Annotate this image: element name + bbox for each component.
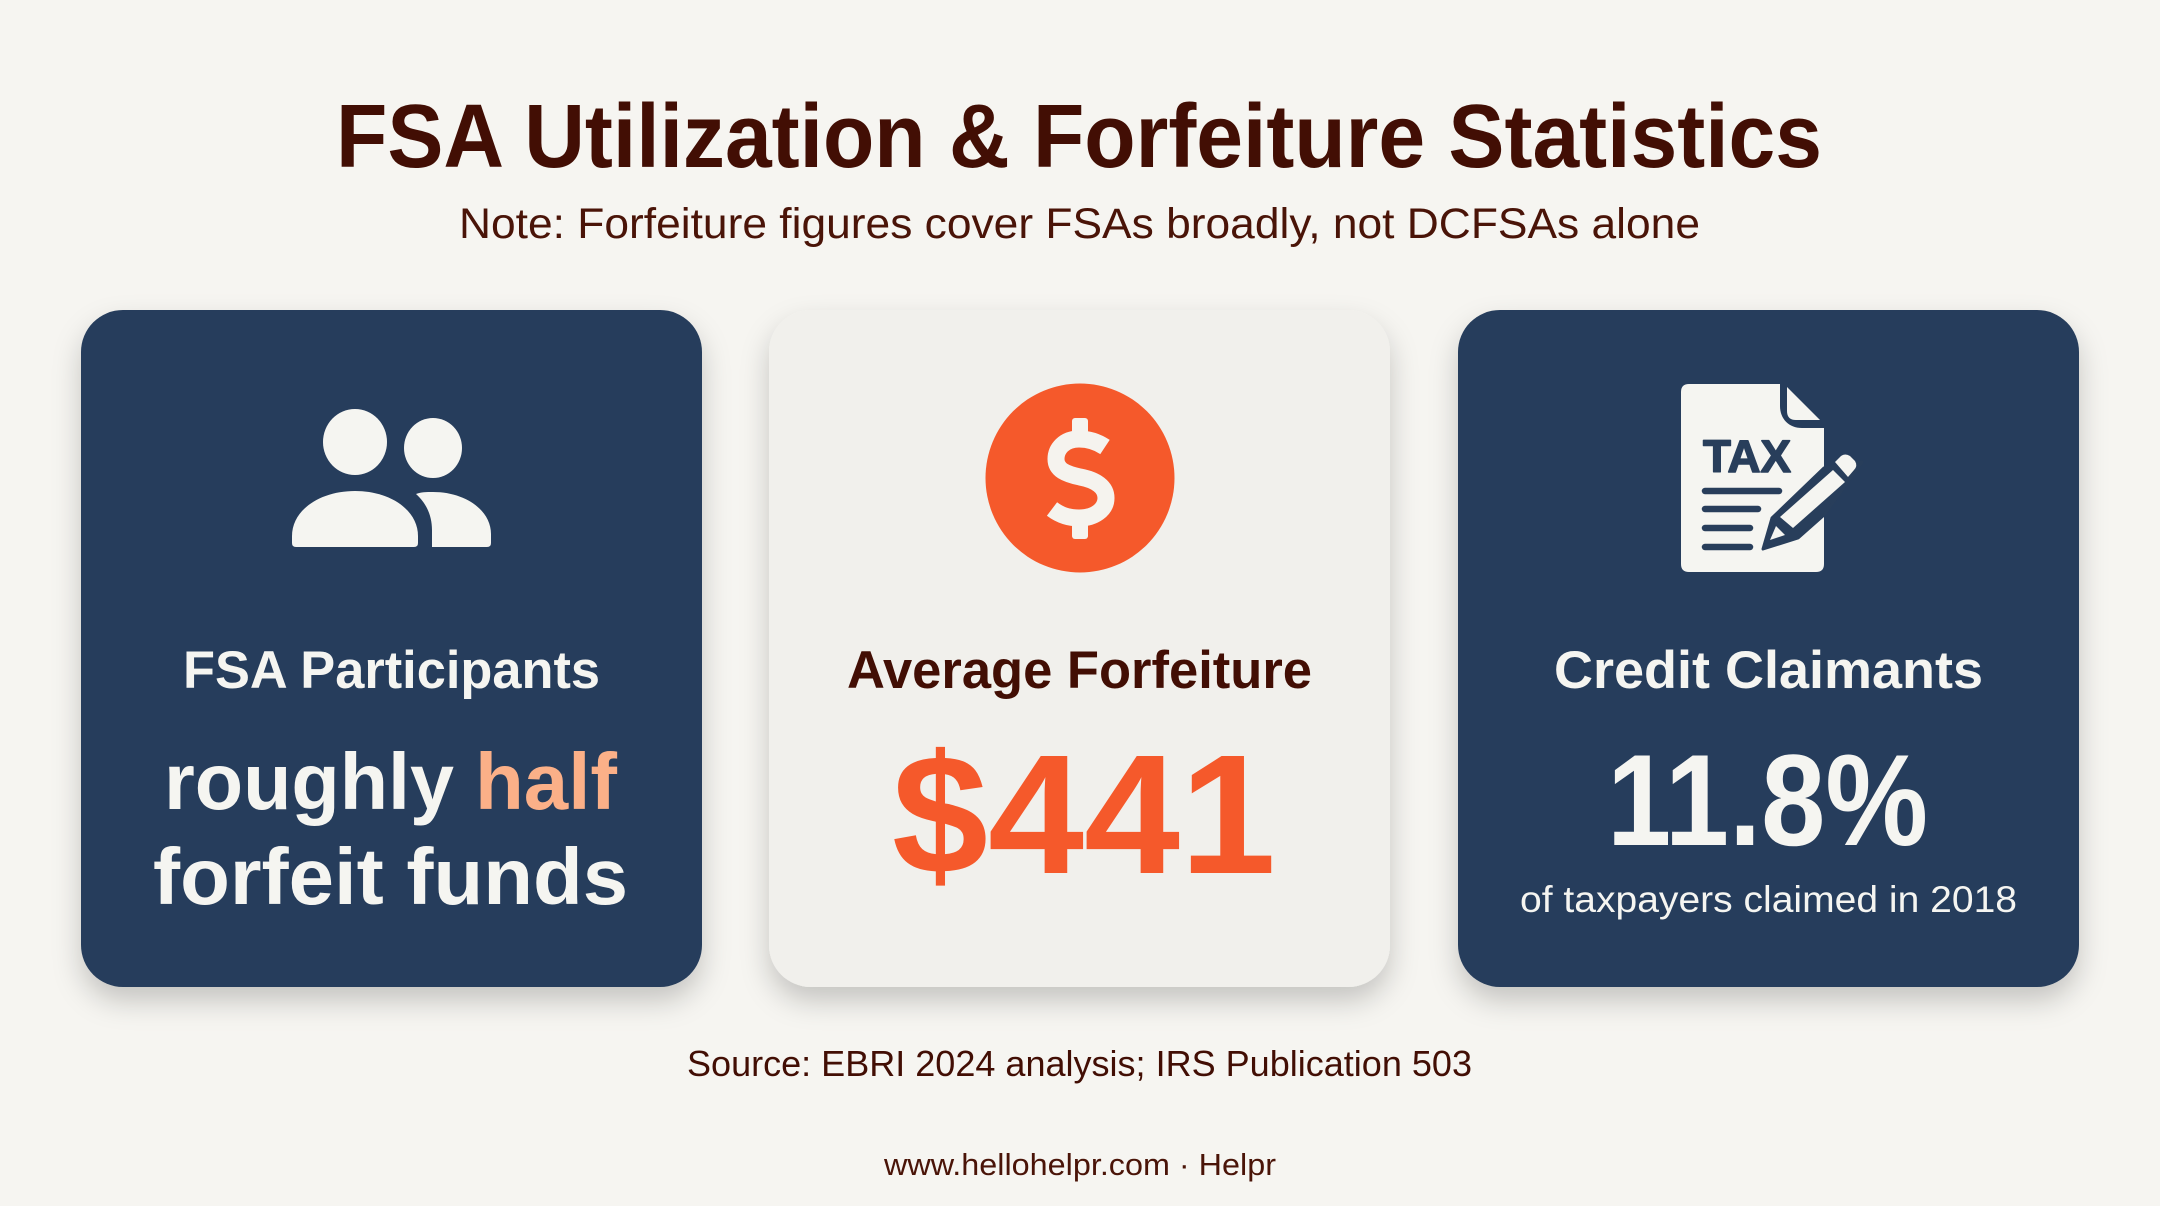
stat caption: of taxpayers claimed in 2018: [1520, 879, 2017, 920]
label: FSA Participants: FSA Participants: [183, 641, 600, 700]
stat: roughly half: half: [475, 737, 617, 826]
icon: tax document with pencil: [1681, 384, 1862, 572]
panel: credit claimants: [1458, 310, 2079, 987]
label: Average Forfeiture: Average Forfeiture: [847, 641, 1312, 700]
panel: FSA participants: [81, 310, 702, 987]
icon: tax document with pencil: TAX: [1703, 431, 1791, 482]
stat: 11.8%: 11.8%: [1607, 727, 1928, 873]
stat: forfeit funds: forfeit funds: [153, 832, 628, 921]
source line: Source: EBRI 2024 analysis; IRS Publication 503: [687, 1043, 1472, 1084]
label: Credit Claimants: Credit Claimants: [1554, 641, 1983, 700]
stat: roughly half: roughly: [164, 737, 454, 826]
stat: roughly half: [164, 737, 617, 826]
title: FSA Utilization & Forfeiture Statistics: [336, 87, 1822, 187]
panel: average forfeiture: [769, 310, 1390, 987]
subtitle note: Note: Forfeiture figures cover FSAs broadly, not DCFSAs alone: [459, 200, 1700, 248]
stat: $441: $441: [892, 720, 1276, 910]
icon: two people: [292, 409, 491, 547]
icon: dollar coin: [986, 384, 1174, 572]
footer: www.hellohelpr.com · Helpr: [883, 1147, 1276, 1182]
